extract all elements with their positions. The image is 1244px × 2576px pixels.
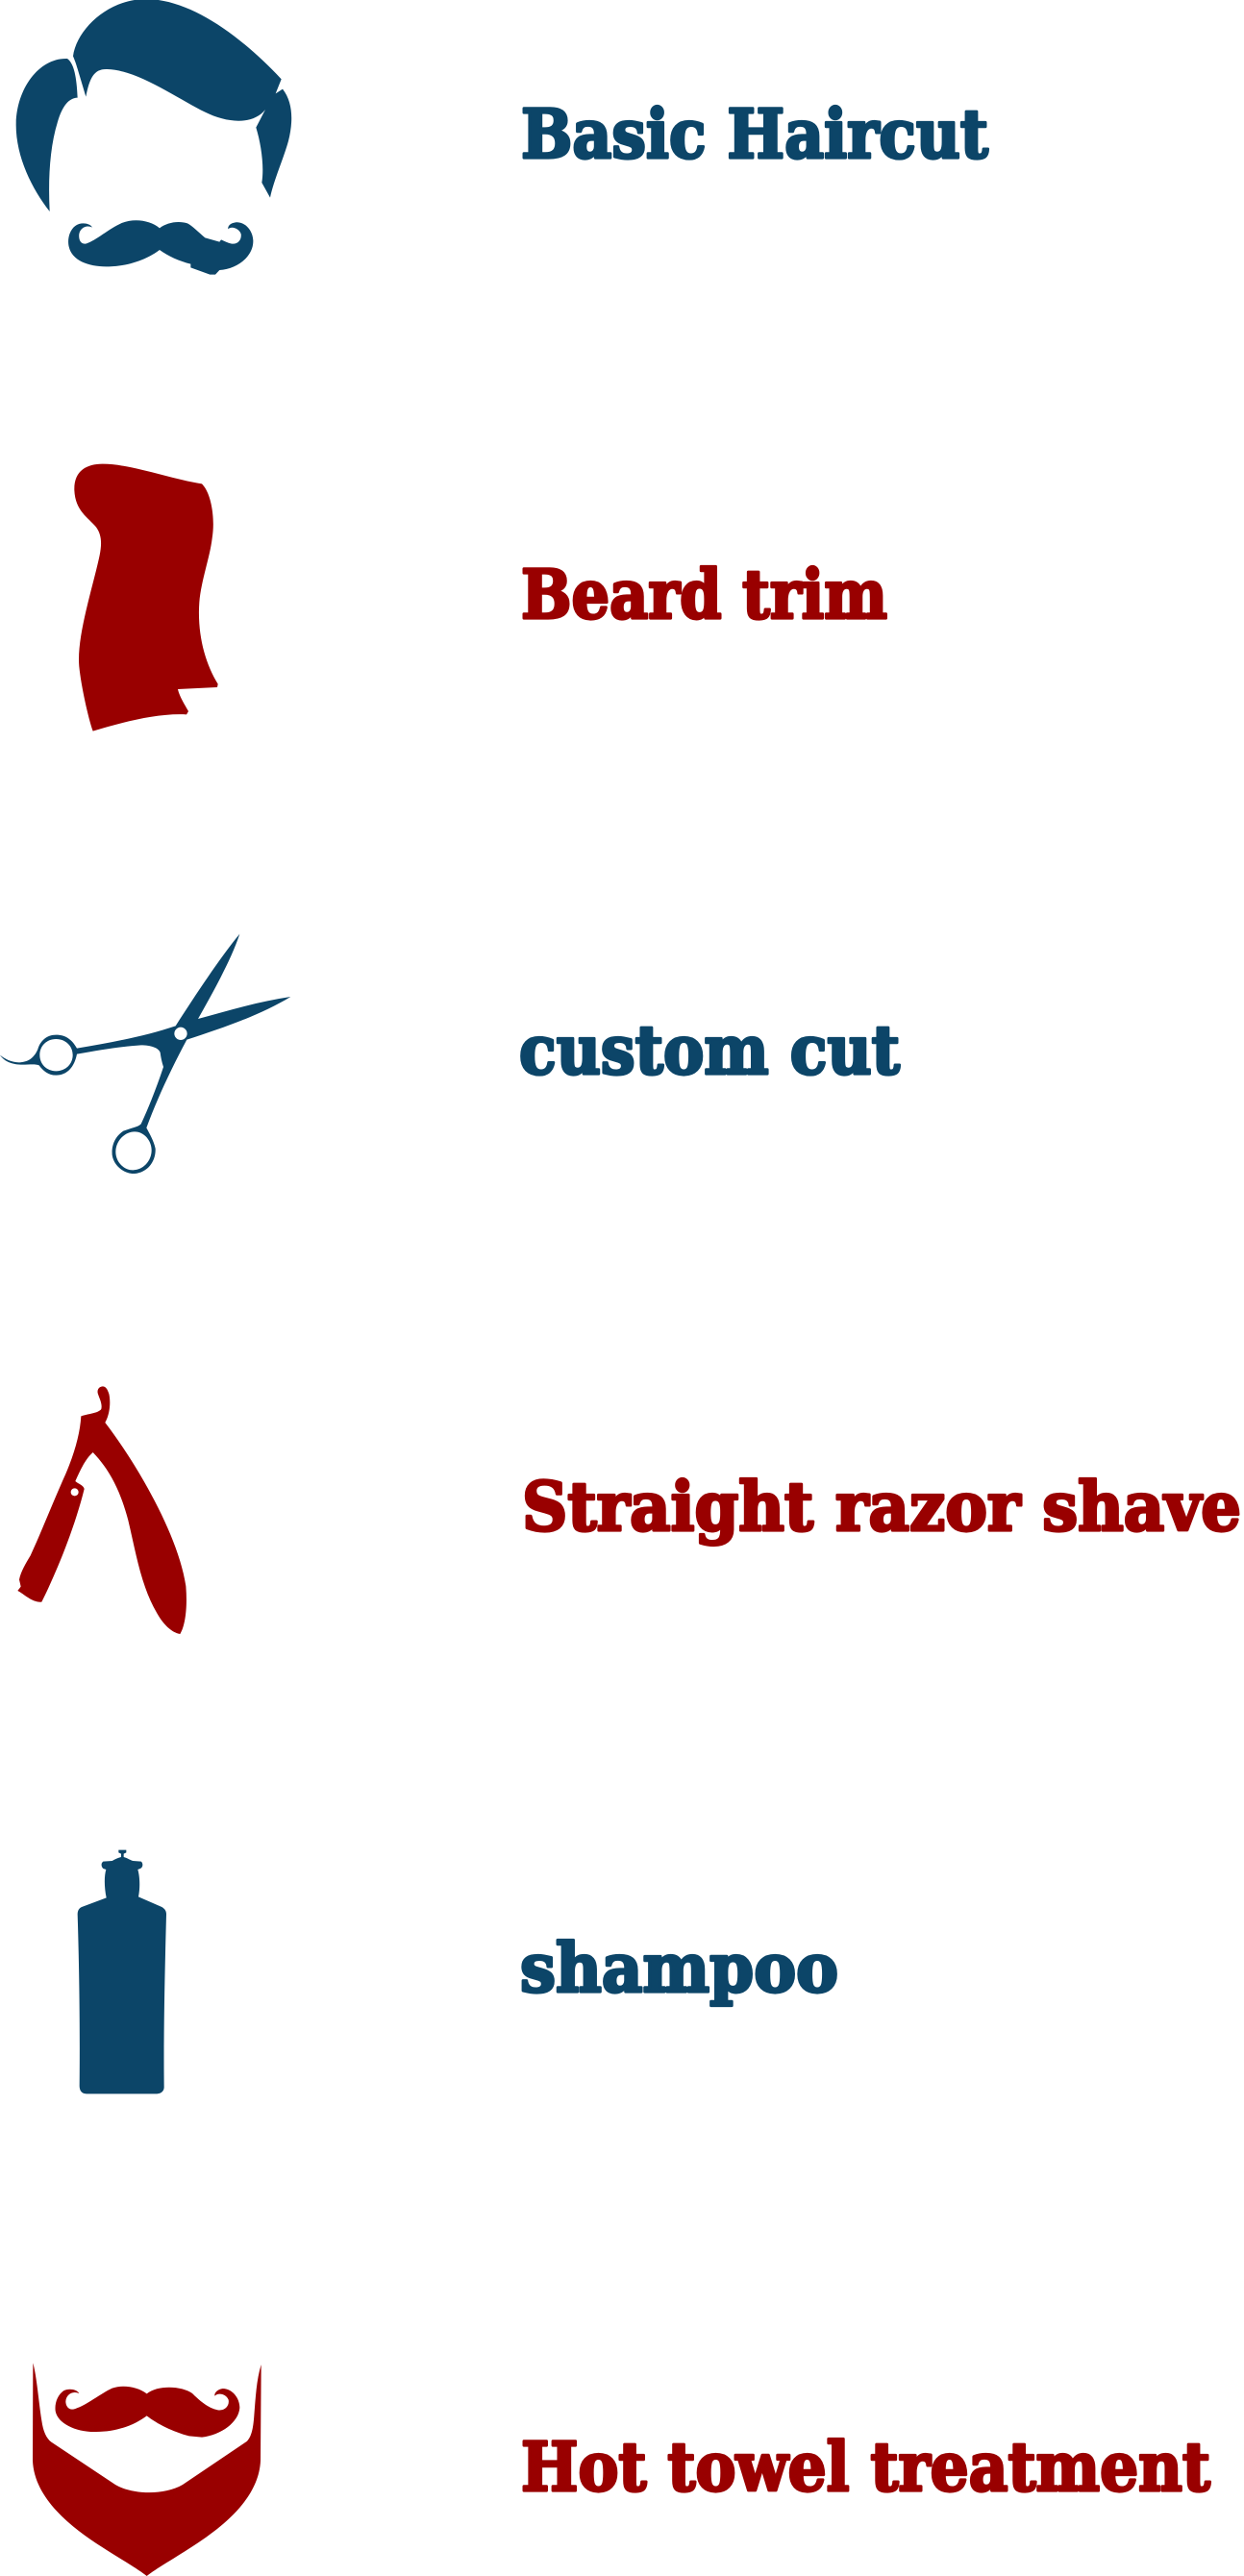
service row: basic haircut xyxy=(16,0,988,275)
service row: custom cut xyxy=(0,934,900,1174)
service row: straight razor shave xyxy=(17,1386,1241,1634)
label: Basic Haircut: Basic Haircut xyxy=(521,94,988,174)
label: shampoo: shampoo xyxy=(520,1928,838,2008)
icon: shampoo bottle xyxy=(78,1850,166,2093)
icon: hair and moustache xyxy=(16,0,291,275)
icon: beard trim cape xyxy=(74,464,218,731)
icon: straight razor xyxy=(17,1386,187,1634)
icon: scissors xyxy=(0,934,290,1174)
icon: beard and moustache xyxy=(33,2363,261,2576)
label: Beard trim: Beard trim xyxy=(521,555,887,634)
service row: beard trim xyxy=(74,464,887,731)
service row: hot towel treatment xyxy=(33,2363,1210,2576)
label: custom cut: custom cut xyxy=(519,1010,900,1090)
service row: shampoo xyxy=(78,1850,838,2093)
